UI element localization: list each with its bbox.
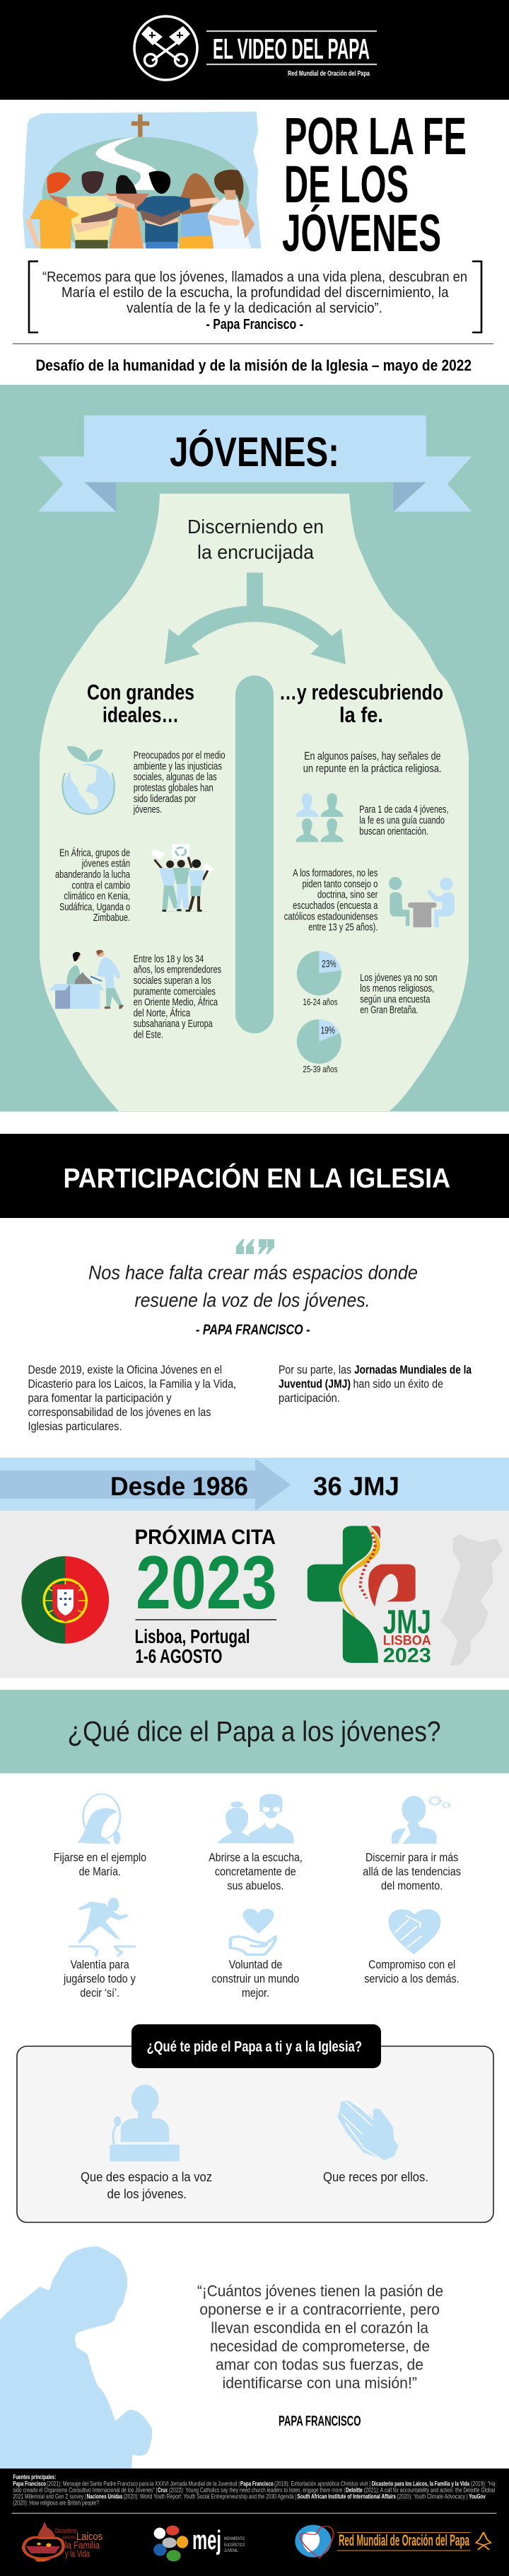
heading: con grandes ideales: ideales… [103,702,179,727]
text: oficina jóvenes: Dicasterio para los Laicos, la Familia y la Vida, [28,1378,236,1391]
icon: JMJ Lisboa logo: LISBOA [383,1634,431,1649]
text: uno de cada cuatro [359,804,448,837]
text: emprendedores sociales: puramente comerciales [134,986,216,997]
text: abuelos: concretamente de [215,1865,296,1879]
text: oficina jóvenes [28,1364,236,1433]
text: valentía [63,1958,136,2000]
icon: quotation marks [236,1239,274,1254]
text: uno de cada cuatro: la fe es una guía cuando [359,815,445,826]
icon: praying hands [337,2101,399,2160]
heading: redescubriendo la fe: la fe. [339,702,383,727]
icon: JMJ Lisboa logo: 2023 [383,1644,431,1667]
icon: person thinking with gears [392,1796,450,1844]
pie chart: 16-24 años 23%: 16-24 años [303,997,338,1007]
heading: con grandes ideales: Con grandes [87,680,194,704]
text: formadores: doctrina, sino ser [317,890,378,901]
panel: youth at the crossroads [0,385,509,1112]
text: oficina jóvenes: Desde 2019, existe la Oficina Jóvenes en el [28,1364,222,1376]
text: emprendedores sociales: Entre los 18 y los 34 [134,953,204,965]
text: África: abanderando la lucha [55,869,131,881]
panel: section title band: PARTICIPACIÓN EN LA IGLESIA [64,1163,450,1194]
text: uno de cada cuatro: buscan orientación. [359,826,428,837]
text: próxima cita [134,1525,277,1667]
text: emprendedores sociales: sociales superan a los [134,975,211,987]
text: África: Zimbabue. [93,912,130,924]
text: compromiso: Compromiso con el [368,1958,455,1971]
text: sources: (2022): Young Catholics say they need church leaders to listen, engage them more | [169,2486,345,2493]
text: medio ambiente: ambiente y las injusticias [134,761,222,772]
panel: since 1986 timeline arrow: Desde 1986 [110,1472,248,1501]
text: compromiso: servicio a los demás. [364,1972,460,1985]
banner: JÓVENES: JÓVENES: [170,429,339,475]
icon: crossed keys logo [134,16,197,80]
text: África: climático en Kenia, [64,891,130,903]
text: discernir: allá de las tendencias [363,1865,461,1879]
text: medio ambiente: sociales, algunas de las [134,772,217,783]
text: sources: Naciones Unidas [87,2493,122,2500]
text: abuelos [209,1851,303,1892]
text: ejemplo de María: de María. [79,1865,121,1879]
text: valentía: Valentía para [71,1958,129,1971]
title: DE LOS [284,155,409,214]
text: sources: South African Institute of International Affairs [297,2493,396,2500]
text: jornadas mundiales [279,1364,472,1405]
icon: heart over open hand [230,1909,276,1954]
silhouette: Pope Francis praying [0,2246,152,2468]
text: África: contra el cambio [72,880,130,891]
text: sources: (2021): Mensaje del Santo Padre Francisco para la XXXVI Jornada Mundial de la Juventud | [47,2480,240,2487]
text: discernir: Discernir para ir más [365,1851,458,1864]
icon: handshake heart [389,1909,440,1954]
panel: what the Pope says heading [0,1690,509,1773]
title [282,107,467,262]
text: jornadas mundiales: Juventud (JMJ) [279,1378,351,1391]
logo: Dicasterio para los Laicos: para los [62,2536,76,2540]
text: próxima cita: PRÓXIMA CITA [134,1525,276,1549]
text: África: jóvenes están [81,859,130,870]
logo: Movimiento Eucarístico Juvenil: MOVIMIENTO [224,2536,245,2541]
logo: Dicasterio para los Laicos: la Familia [65,2539,100,2551]
text: medio ambiente: sido lideradas por [134,794,196,805]
text: oficina jóvenes: Iglesias particulares. [28,1420,122,1433]
text: medio ambiente [133,750,226,816]
text: voluntad [211,1958,299,2000]
icon: runner jumping a gap [69,1898,136,1956]
text: abuelos: sus abuelos. [227,1879,283,1892]
text: medio ambiente: protestas globales han [134,782,213,794]
label: question: ¿Qué te pide el Papa a ti y a la Iglesia? [147,2039,362,2055]
text: formadores [284,868,378,934]
quote: pasión de los jóvenes: amar con todas sus fuerzas, de [216,2356,423,2374]
logo: Dicasterio para los Laicos: Laicos [76,2531,103,2543]
logo wordmark: Red Mundial de Oración del Papa [288,69,370,78]
text: encuesta Gran Bretaña: los menos religiosos, [360,983,434,994]
text: próxima cita: 2023 [136,1540,277,1625]
text: sources: (2020): Youth Climate Advocacy | [397,2493,468,2500]
text: sources: (2019): “Ha [471,2480,496,2487]
text: abuelos: Abrirse a la escucha, [209,1851,303,1864]
prayer intention quote: “Recemos para que los jóvenes, llamados a una vida plena, descubran en [42,269,467,285]
pie chart: 16-24 años 23% [297,951,341,1007]
text: jornadas mundiales: participación. [279,1392,340,1405]
panel: header [0,0,509,100]
text: uno de cada cuatro: Para 1 de cada 4 jóvenes, [359,804,448,816]
text: emprendedores sociales: en Oriente Medio, África [134,997,218,1009]
text: formadores: escuchados (encuesta a [293,900,378,912]
text: medio ambiente: Preocupados por el medio [134,750,226,762]
text: sources: sido creado el Organismo Consultivo Internacional de los Jóvenes” | [13,2486,157,2493]
logo: Red Mundial de Oración del Papa [295,2525,491,2558]
text: discernir [363,1851,461,1892]
text: formadores: católicos estadounidenses [284,911,378,922]
heading: discerning at the crossroads: Discerniendo en [187,516,324,538]
text: emprendedores sociales: del Este. [134,1030,163,1041]
quote: Papa Francisco: resuene la voz de los jóvenes. [134,1289,370,1311]
text: encuesta Gran Bretaña: Los jóvenes ya no son [360,973,437,984]
quote: Papa Francisco [88,1262,418,1338]
icon: two people talking at a table [389,877,455,927]
icon: people packing a donation box [49,950,124,1009]
quote: pasión de los jóvenes: llevan escondida en el corazón la [211,2319,429,2336]
logo wordmark: EL VIDEO DEL PAPA [213,33,370,65]
text: emprendedores sociales: años, los emprendedores [134,965,221,976]
text: sources: Papa Francisco [13,2480,46,2487]
banner: JÓVENES [38,415,472,511]
panel: what the Pope says heading: ¿Qué dice el Papa a los jóvenes? [68,1717,441,1748]
heading: discerning at the crossroads [187,516,324,563]
logo: Movimiento Eucarístico Juvenil: mej [192,2526,221,2555]
text: África: Sudáfrica, Uganda o [59,902,130,913]
logo wordmark [206,31,377,78]
text: medio ambiente: jóvenes. [133,804,162,816]
logo: Dicasterio para los Laicos: y la Vida [65,2548,90,2559]
text: dar espacio: de los jóvenes. [107,2186,187,2201]
heading: redescubriendo la fe [279,680,443,727]
text: sources: YouGov [469,2493,486,2500]
logo: Movimiento Eucarístico Juvenil: JUVENIL [224,2548,238,2553]
text: África [55,847,131,924]
text: voluntad: Voluntad de [229,1958,282,1971]
panel: what the Pope asks [17,2024,493,2222]
icon: speaker at podium [110,2084,180,2162]
icon: JMJ Lisboa logo [308,1526,431,1667]
text: voluntad: mejor. [242,1986,269,2000]
text: sources: Papa Francisco [240,2480,274,2487]
heading: con grandes ideales [87,680,194,727]
quote: pasión de los jóvenes: identificarse con una misión!” [222,2374,417,2392]
icon: grandparents [218,1794,293,1843]
text: repunte religioso: En algunos países, hay señales de [304,750,441,762]
text: repunte religioso: un repunte en la práctica religiosa. [303,763,441,775]
quote: pasión de los jóvenes: “¡Cuántos jóvenes tienen la pasión de [197,2282,443,2300]
text: emprendedores sociales [134,953,221,1041]
logo: Dicasterio para los Laicos [23,2522,103,2562]
text: próxima cita: 1-6 AGOSTO [136,1645,222,1667]
text: valentía: decir ‘sí’. [80,1986,119,2000]
icon: four people, one in four highlighted [296,793,344,842]
text: sources [13,2473,496,2507]
quote: pasión de los jóvenes: PAPA FRANCISCO [279,2413,361,2429]
text: África: En África, grupos de [59,847,130,859]
text: ejemplo de María: Fijarse en el ejemplo [54,1851,146,1864]
panel: since 1986 timeline arrow [0,1458,509,1511]
icon: globe with leaves [62,746,115,814]
text: ejemplo de María [54,1851,146,1879]
pie chart: 25-39 años 19%: 19% [321,1025,335,1036]
heading: discerning at the crossroads: la encrucijada [197,541,314,563]
panel: bottle shape [40,494,469,1111]
text: repunte religioso [303,750,441,775]
text: jornadas mundiales: Por su parte, las [279,1364,351,1376]
pie chart: 25-39 años 19% [297,1019,341,1074]
text: próxima cita: Lisboa, Portugal [134,1625,250,1647]
text: sources: Deloitte [346,2486,363,2493]
text: emprendedores sociales: subsahariana y Europa [134,1019,213,1030]
text: sources: (2020): World Youth Report: Youth Social Entrepreneurship and the 2030 Agenda | [124,2493,296,2500]
panel: next date Lisbon [0,1511,509,1678]
text: dar espacio: Que des espacio a la voz [81,2169,212,2184]
text: formadores: A los formadores, no les [293,868,378,879]
icon: Portugal flag [21,1556,109,1644]
text: encuesta Gran Bretaña: en Gran Bretaña. [360,1005,418,1016]
prayer intention quote: María el estilo de la escucha, la profundidad del discernimiento, la [62,285,449,301]
text: discernir: del momento. [381,1879,443,1892]
logo: Dicasterio para los Laicos: Dicasterio [55,2527,77,2534]
text: oficina jóvenes: corresponsabilidad de los jóvenes en las [28,1406,211,1419]
pie chart: 25-39 años 19%: 25-39 años [303,1064,338,1074]
logo: Movimiento Eucarístico Juvenil [153,2526,245,2561]
label: question [131,2024,381,2068]
text: dar espacio [81,2169,212,2201]
prayer intention quote: valentía de la fe y la dedicación al servicio”. [127,301,382,316]
text: jornadas mundiales: Jornadas Mundiales de la [354,1364,472,1376]
arrow: two-way fork [165,573,346,664]
text: jornadas mundiales: han sido un éxito de [353,1378,443,1391]
text: sources: Fuentes principales: [13,2473,56,2481]
prayer intention quote [29,262,481,332]
text: encuesta Gran Bretaña: según una encuesta [360,994,431,1005]
quote: pasión de los jóvenes [197,2282,443,2429]
text: sources: (2020): How religious are British people? [13,2500,99,2507]
text: encuesta Gran Bretaña [360,973,437,1016]
quote: pasión de los jóvenes: necesidad de comprometerse, de [210,2338,430,2355]
panel: footer [0,2468,509,2576]
text: sources: (2019): Exhortación apostólica Christus vivit | [274,2480,370,2487]
panel: section title band [0,1134,509,1218]
text: valentía: jugárselo todo y [63,1972,136,1985]
center divider pill [235,675,274,1033]
quote: Papa Francisco: Nos hace falta crear más espacios donde [88,1262,418,1284]
text: voluntad: construir un mundo [211,1972,299,1985]
panel: since 1986 timeline arrow: 36 JMJ [313,1472,399,1501]
prayer intention quote: - Papa Francisco - [206,317,303,332]
quote: pasión de los jóvenes: oponerse e ir a contracorriente, pero [199,2301,440,2319]
text: oficina jóvenes: para fomentar la participación y [28,1392,172,1405]
icon: young protesters with signs [151,845,213,912]
text: rezar: Que reces por ellos. [323,2169,428,2184]
text: formadores: piden tanto consejo o [303,878,378,890]
text: sources: 2021 Millennial and Gen Z survey | [13,2493,86,2500]
text: emprendedores sociales: del Norte, África [134,1007,191,1019]
icon: Portugal map [440,1534,503,1666]
pie chart: 16-24 años 23%: 23% [322,959,337,970]
icon: JMJ Lisboa logo: JMJ [383,1603,431,1640]
illustration: young people looking at cross [23,112,262,248]
text: formadores: entre 13 y 25 años). [308,922,378,934]
logo: Movimiento Eucarístico Juvenil: EUCARÍSTICO [224,2541,245,2548]
text: sources: Crux [158,2486,168,2493]
icon: Mary with halo [77,1794,120,1844]
heading: redescubriendo la fe: …y redescubriendo [279,680,443,704]
text: compromiso [364,1958,460,1985]
quote: Papa Francisco: - PAPA FRANCISCO - [196,1323,310,1338]
